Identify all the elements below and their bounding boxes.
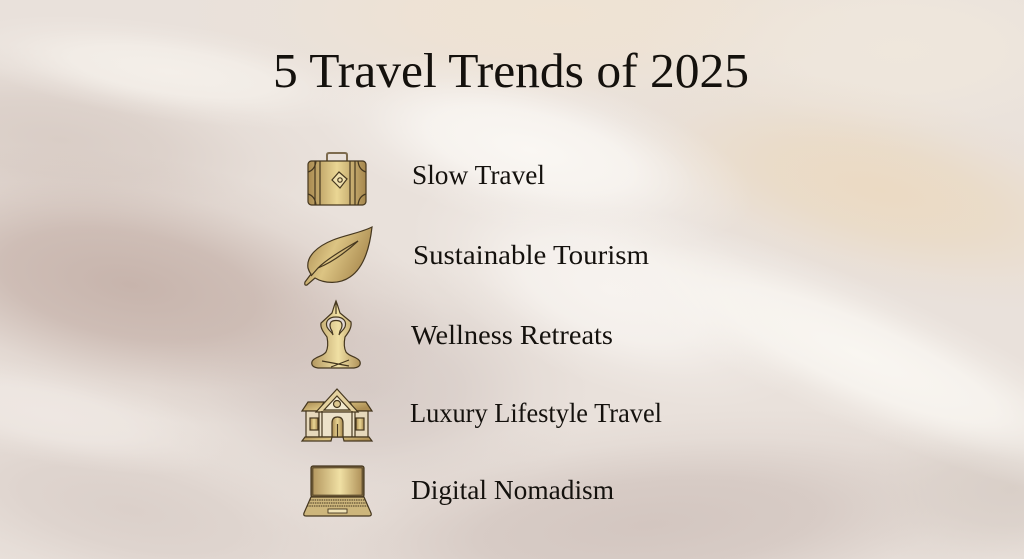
title: 5 Travel Trends of 2025 <box>273 43 749 98</box>
icon: laptop <box>304 466 371 516</box>
sustainable tourism label: Sustainable Tourism <box>413 240 649 270</box>
wellness retreats label: Wellness Retreats <box>411 320 613 350</box>
icon: leaf <box>305 227 372 285</box>
luxury lifestyle travel label: Luxury Lifestyle Travel <box>410 398 662 428</box>
icon: meditation figure <box>312 301 360 368</box>
icon: suitcase <box>308 153 366 205</box>
digital nomadism label: Digital Nomadism <box>411 475 614 505</box>
slow travel label: Slow Travel <box>412 160 545 190</box>
icon: house <box>302 389 372 441</box>
